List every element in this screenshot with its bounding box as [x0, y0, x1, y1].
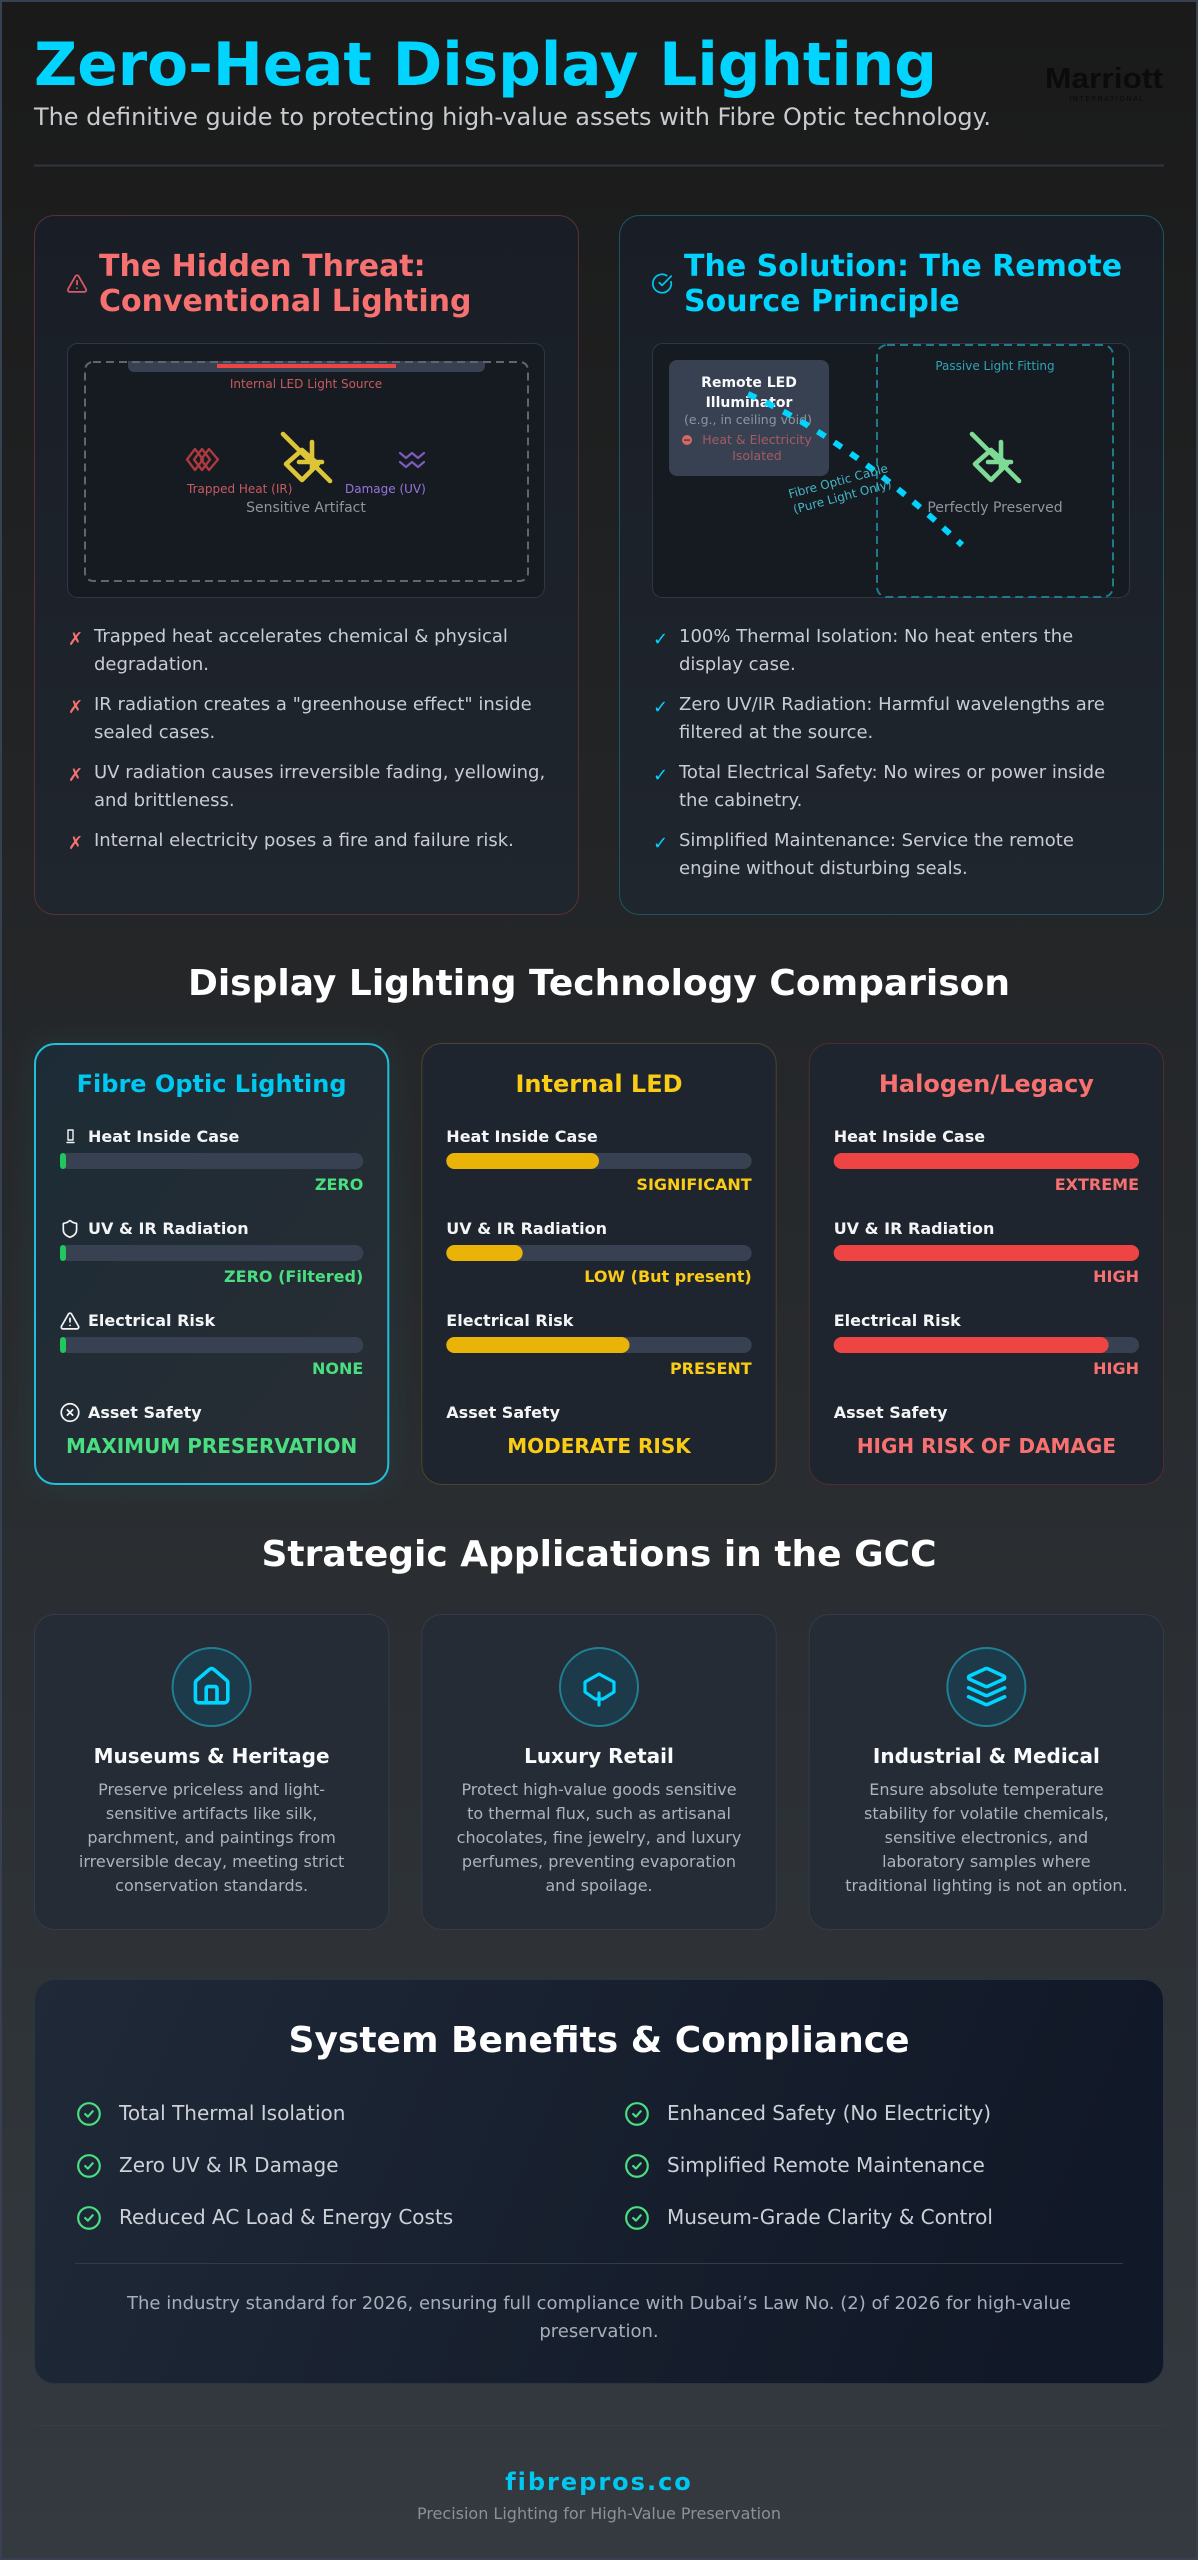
- card: industrial and medical: Ensure absolute temperature: [869, 1780, 1104, 1799]
- card: luxury retail: to thermal flux, such as artisanal: [467, 1804, 731, 1823]
- card: fibre optic lighting: Heat Inside Case: [88, 1127, 240, 1146]
- list: threats: IR radiation creates a "greenhouse effect" inside: [94, 694, 532, 715]
- card: halogen legacy: UV & IR Radiation: [834, 1219, 994, 1238]
- card: fibre optic lighting: ZERO (Filtered): [224, 1267, 363, 1286]
- card: fibre optic lighting: UV & IR Radiation: [88, 1219, 249, 1238]
- list: threats: ✗: [68, 629, 83, 650]
- card: halogen legacy: Halogen/Legacy: [879, 1070, 1094, 1098]
- list: solutions: ✓: [653, 629, 668, 650]
- compliance note: The industry standard for 2026, ensuring full compliance with Dubai’s Law No. (2) of 2026 for high-value: [126, 2293, 1071, 2314]
- benefit list: Enhanced Safety (No Electricity): [667, 2101, 991, 2125]
- card: industrial and medical: laboratory samples where: [882, 1852, 1091, 1871]
- card: fibre optic lighting: NONE: [312, 1359, 363, 1378]
- benefit list: [78, 2101, 993, 2229]
- heading: hidden threat: The Hidden Threat:: [99, 249, 426, 284]
- card: internal LED: [422, 1044, 776, 1484]
- list: solutions: 100% Thermal Isolation: No heat enters the: [679, 626, 1073, 647]
- card: internal LED: MODERATE RISK: [507, 1434, 692, 1458]
- card: museums and heritage: conservation standards.: [115, 1876, 308, 1895]
- logo: Marriott International: INTERNATIONAL: [1069, 95, 1145, 103]
- panel: the solution: [620, 216, 1164, 914]
- list: solutions: Simplified Maintenance: Service the remote: [679, 830, 1074, 851]
- card: halogen legacy: HIGH RISK OF DAMAGE: [857, 1434, 1116, 1458]
- list: threats: Internal electricity poses a fire and failure risk.: [94, 830, 514, 851]
- icon: preserved artifact: [972, 434, 1019, 481]
- card: museums and heritage: Preserve priceless and light-: [98, 1780, 325, 1799]
- footer: [417, 2468, 781, 2523]
- card: halogen legacy: HIGH: [1093, 1359, 1139, 1378]
- list: solutions: Zero UV/IR Radiation: Harmful wavelengths are: [679, 694, 1105, 715]
- icon: artifact with strike: [283, 434, 330, 481]
- card: museums and heritage: sensitive artifacts like silk,: [106, 1804, 317, 1823]
- icon: electrical warning: [61, 1313, 79, 1329]
- list: threats: ✗: [68, 833, 83, 854]
- list: threats: and brittleness.: [94, 790, 235, 811]
- card: fibre optic lighting: Fibre Optic Lighting: [77, 1070, 347, 1098]
- card: internal LED: Internal LED: [515, 1070, 683, 1098]
- list: solutions: [653, 626, 1105, 879]
- icon: shield: [63, 1221, 77, 1237]
- remote illuminator box: (e.g., in ceiling void): [684, 412, 812, 427]
- remote illuminator box: [669, 360, 829, 476]
- list: solutions: ✓: [653, 833, 668, 854]
- card: fibre optic lighting: MAXIMUM PRESERVATION: [66, 1434, 357, 1458]
- list: threats: ✗: [68, 697, 83, 718]
- header: [33, 30, 1163, 131]
- list: threats: [68, 626, 545, 854]
- card: internal LED: Heat Inside Case: [446, 1127, 598, 1146]
- fibre optic cable: [748, 394, 962, 545]
- list: threats: degradation.: [94, 654, 209, 675]
- label: sensitive artifact: Sensitive Artifact: [246, 500, 366, 516]
- icon: retail: [560, 1648, 638, 1726]
- title: Zero-Heat Display Lighting: [34, 30, 937, 100]
- card: luxury retail: [422, 1614, 776, 1930]
- icon: UV waves: [400, 453, 424, 467]
- label: damage UV: Damage (UV): [345, 482, 426, 496]
- label: trapped heat: Trapped Heat (IR): [186, 482, 292, 496]
- logo: Marriott International: Marriott: [1045, 63, 1163, 95]
- list: threats: UV radiation causes irreversible fading, yellowing,: [94, 762, 545, 783]
- label: passive fitting: Passive Light Fitting: [935, 359, 1055, 373]
- heading: comparison: Display Lighting Technology Comparison: [188, 963, 1010, 1004]
- card: fibre optic lighting: Electrical Risk: [88, 1311, 215, 1330]
- heading: benefits: System Benefits & Compliance: [289, 2020, 909, 2061]
- card: luxury retail: Luxury Retail: [524, 1744, 674, 1768]
- card: fibre optic lighting: ZERO: [315, 1175, 363, 1194]
- list: solutions: the cabinetry.: [679, 790, 802, 811]
- icon: trapped heat: [187, 449, 218, 470]
- heading: strategic applications: Strategic Applications in the GCC: [261, 1534, 937, 1575]
- card: fibre optic lighting: Asset Safety: [88, 1403, 202, 1422]
- footer: fibrepros.co: [505, 2468, 693, 2496]
- panel: the hidden threat: [34, 216, 578, 914]
- card: fibre optic lighting: [35, 1044, 388, 1484]
- card: internal LED: LOW (But present): [584, 1267, 752, 1286]
- benefit list: Reduced AC Load & Energy Costs: [119, 2205, 453, 2229]
- card: internal LED: PRESENT: [670, 1359, 752, 1378]
- card: luxury retail: and spoilage.: [545, 1876, 653, 1895]
- list: threats: sealed cases.: [94, 722, 215, 743]
- list: solutions: ✓: [653, 697, 668, 718]
- list: threats: ✗: [68, 765, 83, 786]
- card: museums and heritage: irreversible decay, meeting strict: [79, 1852, 344, 1871]
- heading: hidden threat: Conventional Lighting: [99, 284, 472, 319]
- card: halogen legacy: Heat Inside Case: [834, 1127, 985, 1146]
- remote illuminator box: Remote LED: [701, 375, 797, 391]
- list: solutions: ✓: [653, 765, 668, 786]
- list: solutions: Total Electrical Safety: No wires or power inside: [678, 762, 1105, 783]
- card: halogen legacy: HIGH: [1093, 1267, 1139, 1286]
- LED light source: [217, 364, 396, 368]
- heading: the solution: The Solution: The Remote: [684, 249, 1122, 284]
- icon: layers: [947, 1648, 1025, 1726]
- label: fibre optic cable: (Pure Light Only): [792, 477, 893, 517]
- card: internal LED: SIGNIFICANT: [636, 1175, 752, 1194]
- footer: Precision Lighting for High-Value Preservation: [417, 2504, 781, 2523]
- list: solutions: display case.: [679, 654, 796, 675]
- card: internal LED: Asset Safety: [446, 1403, 561, 1422]
- label: perfectly preserved: Perfectly Preserved: [927, 500, 1063, 516]
- benefit list: Simplified Remote Maintenance: [667, 2153, 985, 2177]
- card: industrial and medical: Industrial & Medical: [873, 1744, 1100, 1768]
- compliance note: [126, 2293, 1071, 2342]
- card: industrial and medical: sensitive electronics, and: [885, 1828, 1088, 1847]
- label: fibre optic cable: Fibre Optic Cable: [787, 461, 889, 501]
- diagram: remote source: [652, 344, 1130, 598]
- remote illuminator box: Heat & Electricity: [702, 432, 812, 447]
- card: halogen legacy: Electrical Risk: [834, 1311, 961, 1330]
- card: industrial and medical: stability for volatile chemicals,: [864, 1804, 1109, 1823]
- icon: home: [173, 1648, 251, 1726]
- panel: system benefits and compliance: [34, 1980, 1164, 2384]
- list: threats: Trapped heat accelerates chemical & physical: [93, 626, 508, 647]
- icon: warning triangle: [68, 275, 86, 292]
- icon: thermometer glyph: [67, 1130, 74, 1142]
- label: internal LED: Internal LED Light Source: [230, 377, 382, 391]
- card: museums and heritage: parchment, and paintings from: [87, 1828, 336, 1847]
- label: fibre optic cable: [787, 461, 894, 517]
- passive light fitting box: [877, 345, 1113, 597]
- card: halogen legacy: [809, 1044, 1164, 1484]
- icon: x circle: [61, 1404, 79, 1421]
- card: luxury retail: perfumes, preventing evaporation: [462, 1852, 736, 1871]
- subtitle: The definitive guide to protecting high-value assets with Fibre Optic technology.: [33, 103, 991, 131]
- compliance note: preservation.: [539, 2321, 659, 2342]
- list: solutions: engine without disturbing seals.: [679, 858, 968, 879]
- diagram: conventional lighting: [68, 344, 544, 598]
- icon: check circle: [653, 274, 671, 293]
- card: museums and heritage: Museums & Heritage: [94, 1744, 330, 1768]
- heading: the solution: Source Principle: [684, 284, 960, 319]
- card: industrial and medical: [809, 1614, 1164, 1930]
- card: luxury retail: chocolates, fine jewelry, and luxury: [457, 1828, 741, 1847]
- card: halogen legacy: EXTREME: [1055, 1175, 1139, 1194]
- card: industrial and medical: traditional lighting is not an option.: [845, 1876, 1128, 1895]
- remote illuminator box: Isolated: [732, 448, 782, 463]
- benefit list: Zero UV & IR Damage: [119, 2153, 339, 2177]
- benefit list: Total Thermal Isolation: [118, 2101, 345, 2125]
- list: solutions: filtered at the source.: [679, 722, 873, 743]
- card: luxury retail: Protect high-value goods sensitive: [461, 1780, 737, 1799]
- benefit list: Museum-Grade Clarity & Control: [667, 2205, 993, 2229]
- remote illuminator box: Illuminator: [706, 395, 792, 411]
- card: internal LED: UV & IR Radiation: [446, 1219, 607, 1238]
- card: museums and heritage: [34, 1614, 389, 1930]
- card: halogen legacy: Asset Safety: [834, 1403, 948, 1422]
- card: internal LED: Electrical Risk: [446, 1311, 574, 1330]
